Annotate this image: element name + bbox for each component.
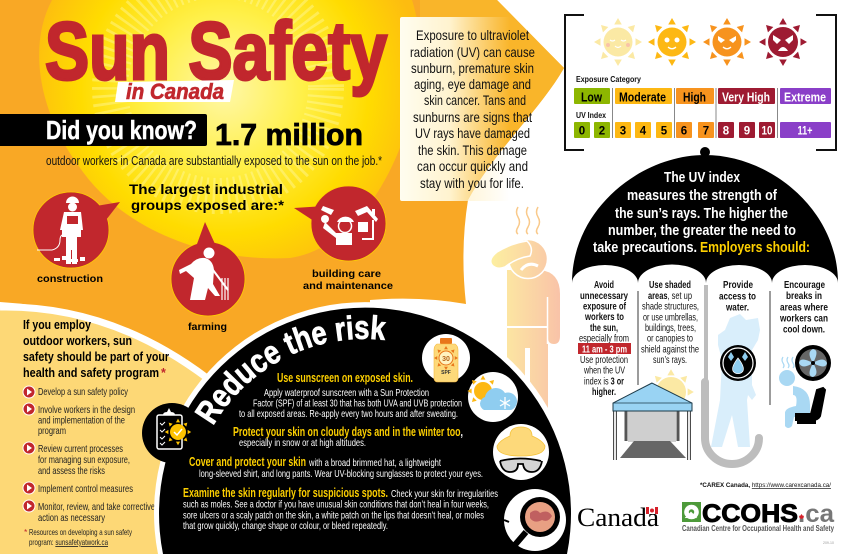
column 2 text: shade structures, <box>642 300 699 312</box>
heading: employer program: * <box>161 366 166 380</box>
umbrella handle <box>704 285 708 380</box>
logo: Canada wordmark: Canada <box>577 503 659 532</box>
tip: cover and protect: Cover and protect your skin <box>189 455 306 469</box>
panel: black umbrella canopy <box>572 155 838 283</box>
list: program steps: action as necessary <box>38 512 106 524</box>
tip: sunscreen: to all exposed areas. Re-apply every two hours and after sweating. <box>239 408 458 420</box>
list: program steps: Review current processes <box>38 443 123 455</box>
tip: examine skin: Examine the skin regularly for suspicious spots. <box>183 486 388 500</box>
panel: UV callout: stay with you for life. <box>420 175 524 191</box>
column 3 text: water. <box>725 302 749 314</box>
tip: sunscreen: Apply waterproof sunscreen with a Sun Protection <box>264 387 429 399</box>
panel: UV callout: sunburn, premature skin <box>411 60 534 76</box>
icon: fan <box>795 345 831 381</box>
statistic caption: outdoor workers in Canada are substantially exposed to the sun on the job.* <box>46 154 382 168</box>
list: program steps: and implementation of the <box>38 414 125 426</box>
heading: employer program: outdoor workers, sun <box>23 334 132 348</box>
panel: UV callout: can occur quickly and <box>417 158 528 174</box>
column 1 text: when the UV <box>583 364 625 376</box>
column dividers <box>638 291 770 405</box>
column 4 text <box>779 279 828 336</box>
label: construction: construction <box>37 273 103 285</box>
column 1 text: exposure of <box>583 300 626 312</box>
background: orange sun field <box>0 0 564 400</box>
heading: employer program <box>23 318 169 380</box>
list: program steps: Monitor, review, and take corrective <box>38 501 155 513</box>
resources note: Resources on developing a sun safety <box>29 527 133 537</box>
category bars: Extreme <box>784 90 826 104</box>
category bars: Very High <box>722 90 770 104</box>
panel: UV callout: Exposure to ultraviolet <box>416 27 529 43</box>
did you know banner <box>0 114 207 146</box>
column 2 text: buildings, trees, <box>645 322 696 334</box>
column 2 text: shield against the <box>641 344 699 356</box>
heading: largest industrial groups: groups exposed are:* <box>131 198 285 213</box>
logo: CCOHS: CCOHS <box>702 500 798 528</box>
icon: magnifier over skin <box>504 489 566 551</box>
heading: largest industrial groups: The largest industrial <box>129 182 283 197</box>
tip: cloudy days <box>233 425 463 449</box>
umbrella intro text: measures the strength of <box>627 187 778 204</box>
did you know banner: Did you know? <box>46 115 197 145</box>
tip: examine skin: such as moles. See a doctor if you have unusual skin conditions that don’t heal in four weeks, <box>183 498 489 510</box>
icon: water drops <box>720 345 756 381</box>
category bars: High <box>683 90 706 104</box>
icon: construction <box>33 192 120 268</box>
column 1 text: Avoid <box>594 279 614 291</box>
category bars <box>574 88 831 104</box>
panel: UV callout: the skin. This damage <box>418 142 527 158</box>
index number boxes: 0 <box>579 126 585 138</box>
list: program steps: Involve workers in the design <box>38 404 135 416</box>
index number boxes: 5 <box>661 126 668 138</box>
icon: farming <box>171 222 245 316</box>
column 4 text: breaks in <box>786 290 822 302</box>
panel: UV callout: UV rays have damaged <box>415 125 530 141</box>
umbrella intro text: Employers should: <box>700 239 810 256</box>
column 2 text: or canopies to <box>647 332 693 344</box>
panel: UV callout: radiation (UV) can cause <box>410 44 535 60</box>
list: program steps: and assess the risks <box>38 465 105 477</box>
column 4 text: areas where <box>780 302 828 314</box>
column 1 text: 11 am - 3 pm <box>582 344 627 356</box>
column 1 text <box>578 279 631 398</box>
umbrella intro text: number, the greater the need to <box>608 222 796 239</box>
category bars: Moderate <box>619 90 666 104</box>
illustration: shade tent <box>613 369 694 460</box>
column 2 text: Use shaded <box>649 279 691 291</box>
subtitle banner: in Canada: in Canada <box>126 79 224 104</box>
column 4 text: workers can <box>779 312 828 324</box>
source note: *CAREX Canada, https://www.carexcanada.ca/ <box>700 482 831 489</box>
background: yellow sun disc <box>39 0 420 258</box>
tip: sunscreen: Factor (SPF) of at least 30 that has both UVA and UVB protection <box>253 398 462 410</box>
label: building care and maintenance <box>303 268 393 292</box>
umbrella intro text: take precautions. <box>593 239 697 256</box>
icon: very high sun <box>759 18 807 66</box>
panel: pale yellow employer section <box>0 308 205 554</box>
index number boxes: 7 <box>703 126 709 138</box>
index number boxes: 4 <box>640 126 647 138</box>
list: program steps: for managing sun exposure, <box>38 454 130 466</box>
icon: sunscreen bottle: 30 <box>442 356 450 363</box>
tip: cloudy days: especially in snow or at high altitudes. <box>239 437 366 449</box>
list: program steps: Develop a sun safety policy <box>38 386 129 398</box>
panel: UV index scale <box>565 15 836 150</box>
decorative ray ring <box>110 0 326 196</box>
column 1 text: index is 3 or <box>584 376 624 388</box>
index number boxes <box>574 122 831 138</box>
category bars: Low <box>581 90 602 104</box>
title: Sun Safety <box>45 6 387 97</box>
logo: CCOHS: 209-10 <box>823 541 834 545</box>
heading: employer program: If you employ <box>23 318 91 332</box>
list: program steps <box>23 386 155 524</box>
column 2 text: or use umbrellas, <box>643 312 698 324</box>
logo: CCOHS <box>682 500 835 545</box>
heading: largest industrial groups <box>129 182 285 213</box>
illustration: worker cooling down on chair <box>779 357 825 428</box>
panel: UV callout <box>400 0 564 201</box>
tip: examine skin <box>183 486 498 532</box>
resources note: * <box>24 527 28 537</box>
umbrella tip <box>700 147 710 157</box>
icon: high sun <box>703 18 751 66</box>
index number boxes: 2 <box>599 126 605 138</box>
label: farming: farming <box>188 321 227 333</box>
column 2 text: sun’s rays. <box>653 354 687 366</box>
illustration: person drinking water <box>711 314 760 447</box>
column 3 text <box>719 279 756 314</box>
logo: CCOHS: .ca <box>798 500 835 528</box>
resources note <box>24 527 133 547</box>
icon: moderate sun <box>648 18 696 66</box>
tip: cloudy days: Protect your skin on cloudy days and in the winter too, <box>233 425 463 439</box>
column 1 text: the sun, <box>590 322 618 334</box>
illustration: overheated worker <box>491 207 560 410</box>
heading: employer program: health and safety program <box>23 366 159 380</box>
icon: sun and cloud <box>467 372 518 422</box>
column 1 text: Use protection <box>580 354 628 366</box>
list: program steps: Implement control measures <box>38 483 133 495</box>
column 3 text: Provide <box>723 279 753 291</box>
statistic: 1.7 million: 1.7 million <box>215 117 363 152</box>
label: building care and maintenance: and maintenance <box>303 280 393 292</box>
tip: cover and protect: with a broad brimmed hat, a lightweight <box>308 457 441 469</box>
panel: UV callout: sunburns are signs that <box>413 109 532 125</box>
column 2 text <box>641 279 699 366</box>
icon: clipboard with sun <box>142 403 202 463</box>
tip: cover and protect <box>189 455 483 480</box>
tip: examine skin: Check your skin for irregularities <box>391 488 498 500</box>
index number boxes: 8 <box>723 126 730 138</box>
index number boxes: 3 <box>620 126 626 138</box>
heading: employer program: safety should be part of your <box>23 350 169 364</box>
icon: building care and maintenance <box>294 186 386 261</box>
tip: examine skin: that grow quickly, change shape or colour, or bleed repeatedly. <box>183 520 388 532</box>
index number boxes: 10 <box>762 126 772 138</box>
column 4 text: Encourage <box>784 279 825 291</box>
column 1 text: especially from <box>579 332 629 344</box>
panel edge <box>0 307 207 378</box>
tip: sunscreen <box>239 371 462 420</box>
column 1 text: unnecessary <box>580 290 628 302</box>
tip: cover and protect: long-sleeved shirt, and long pants. Wear UV-blocking sunglasses to protect your eyes. <box>199 468 483 480</box>
resources note: program: sunsafetyatwork.ca <box>29 537 108 547</box>
panel: UV callout: skin cancer. Tans and <box>424 92 526 108</box>
index number boxes: 9 <box>744 126 750 138</box>
umbrella intro text <box>593 169 810 256</box>
icon: sunscreen bottle: SPF <box>441 370 451 376</box>
column 2 text: areas, set up <box>648 290 692 302</box>
label: building care and maintenance: building care <box>312 268 381 280</box>
index number boxes: 6 <box>681 126 687 138</box>
column 1 text: higher. <box>592 386 616 398</box>
heading: Reduce the risk: Reduce the risk <box>194 314 386 425</box>
icon: sunscreen bottle <box>422 334 470 382</box>
icon: low sun <box>594 18 642 66</box>
column 1 text: workers to <box>584 311 624 323</box>
tip: sunscreen: Use sunscreen on exposed skin. <box>277 371 413 385</box>
column 4 text: cool down. <box>783 324 825 336</box>
index number boxes: 11+ <box>798 126 813 138</box>
label: exposure category: Exposure Category <box>576 74 641 84</box>
panel: UV callout: aging, eye damage and <box>414 76 531 92</box>
column 3 text: access to <box>719 290 756 302</box>
umbrella handle hook <box>705 382 759 464</box>
panel: black reduce-the-risk dome <box>154 302 576 554</box>
list: program steps: program <box>38 425 66 437</box>
label: UV index: UV Index <box>576 111 606 120</box>
tip: examine skin: sore ulcers or a scaly patch on the skin, a white patch on the lips that doesn’t heal, or moles <box>183 510 484 522</box>
umbrella intro text: the sun’s rays. The higher the <box>615 205 788 222</box>
icon: hat and sunglasses <box>493 424 549 480</box>
umbrella intro text: The UV index <box>664 169 741 186</box>
